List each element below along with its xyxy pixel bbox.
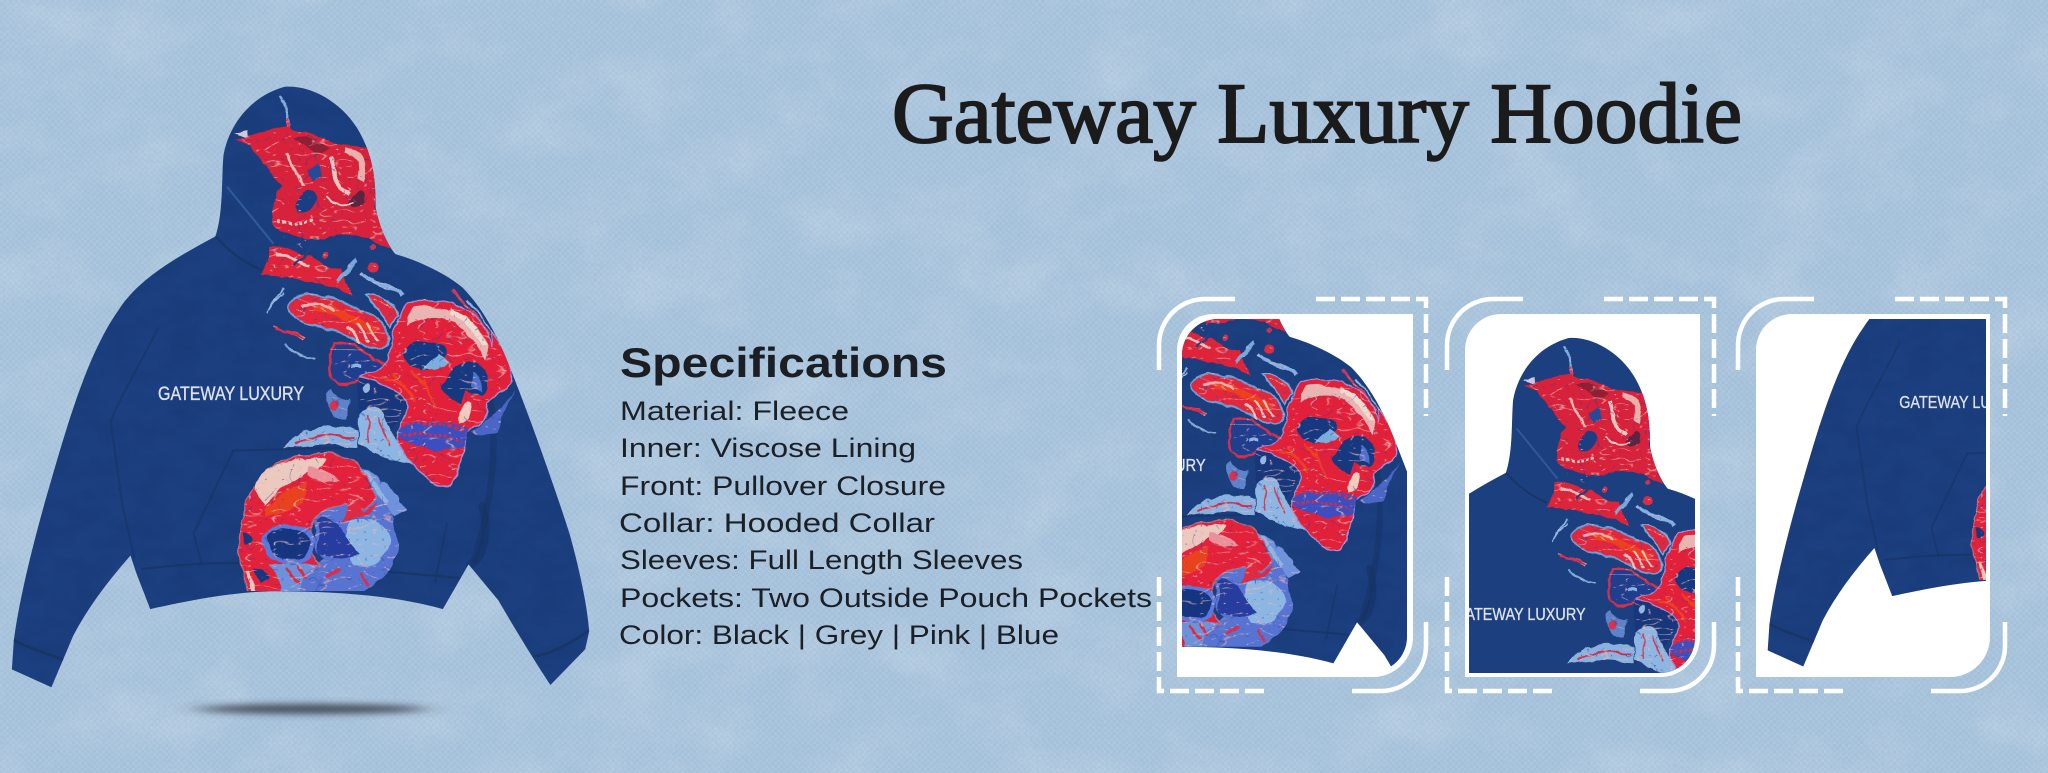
specifications heading: Specifications — [620, 339, 947, 386]
spec: pockets: Pockets: Two Outside Pouch Pockets — [620, 583, 1152, 613]
dashed frame 1 — [1159, 299, 1426, 691]
dashed frame 2 — [1447, 299, 1714, 691]
white card 3 — [1756, 314, 1990, 677]
cropped hoodie 1: GATEWAY LUXURY — [1071, 455, 1206, 475]
specifications block — [619, 339, 1152, 650]
shadow under hoodie — [197, 704, 427, 714]
title: Gateway Luxury Hoodie — [892, 65, 1742, 161]
spec: inner: Inner: Viscose Lining — [620, 433, 916, 463]
cropped hoodie 2: GATEWAY LUXURY — [1454, 605, 1586, 624]
spec: sleeves: Sleeves: Full Length Sleeves — [620, 545, 1023, 575]
cropped hoodie 1 — [1182, 319, 1407, 666]
cropped hoodie 2 — [1469, 338, 1695, 673]
dashed frame 3 — [1738, 299, 2005, 691]
white card 1 — [1177, 314, 1413, 677]
spec: material: Material: Fleece — [620, 396, 849, 426]
hoodie logo text: GATEWAY LUXURY — [158, 384, 304, 405]
cropped hoodie 3 — [1768, 319, 1986, 666]
main hoodie product image — [0, 80, 600, 700]
panel 1: skull close-up — [1156, 296, 1428, 694]
panel 3: sleeve close-up — [1736, 296, 2008, 694]
spec: color: Color: Black | Grey | Pink | Blue — [619, 620, 1059, 650]
panel 2: hood close-up — [1444, 296, 1716, 694]
white card 2 — [1465, 314, 1700, 677]
spec: front: Front: Pullover Closure — [620, 471, 946, 501]
spec: collar: Collar: Hooded Collar — [619, 508, 935, 538]
